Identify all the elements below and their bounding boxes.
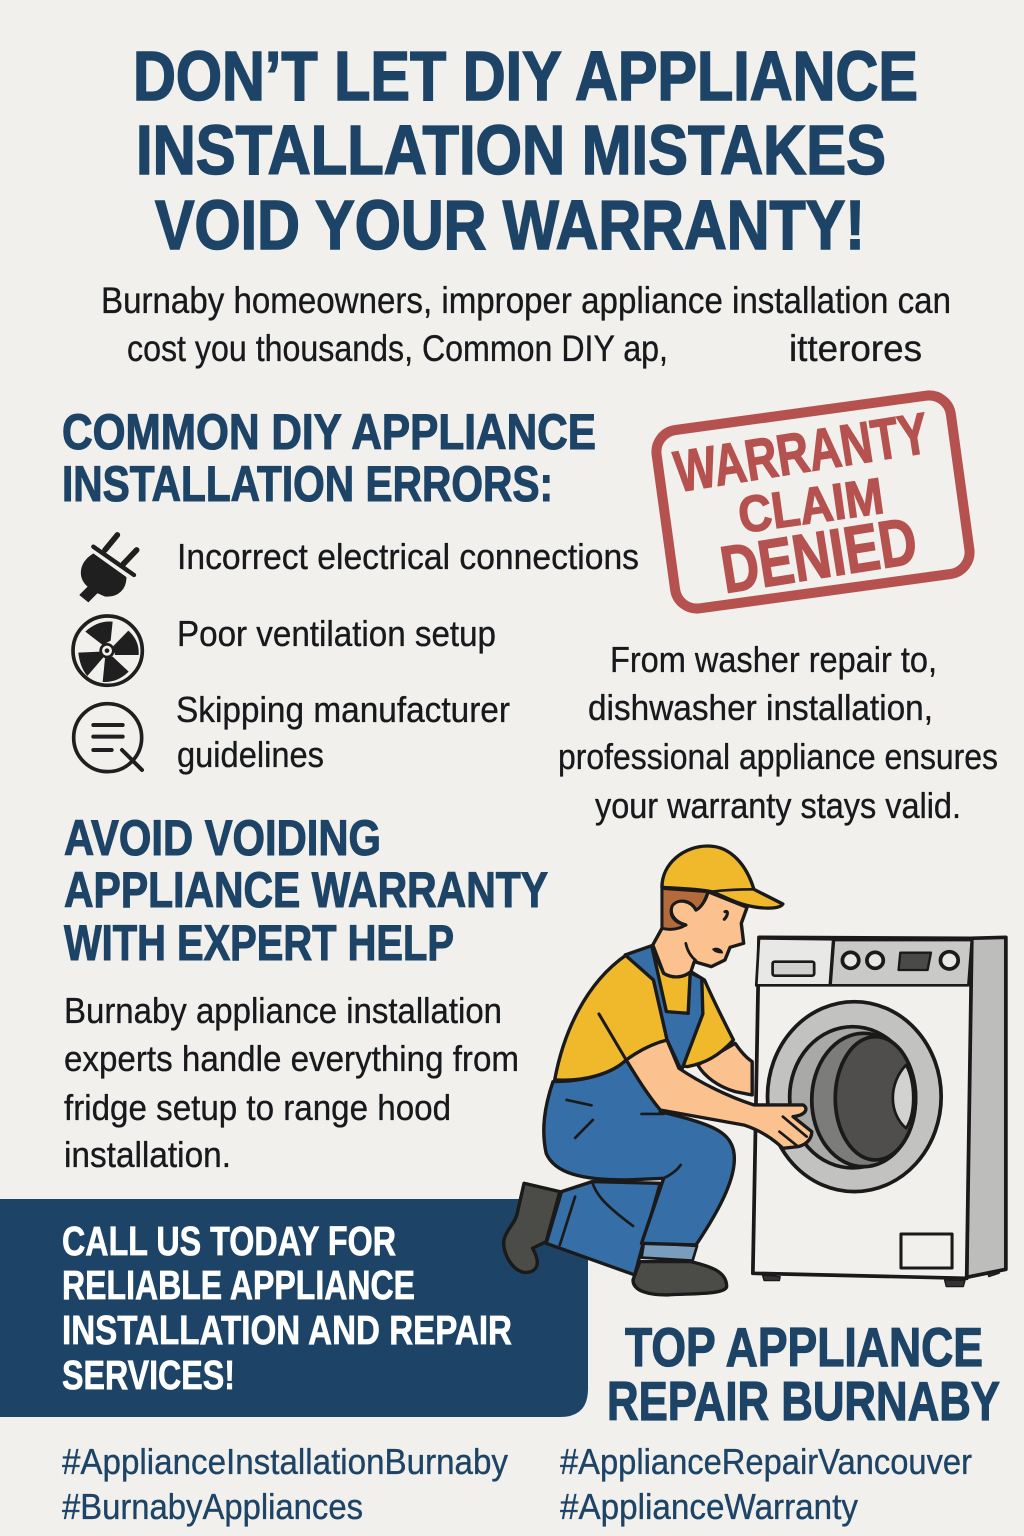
expert help text: Burnaby appliance installation — [64, 990, 502, 1031]
intro text: itterores — [789, 328, 922, 369]
hat — [662, 846, 783, 908]
heading: common errors: COMMON DIY APPLIANCE — [62, 404, 596, 460]
overalls lower — [544, 1060, 734, 1245]
stamp: warranty claim denied: CLAIM — [735, 467, 887, 544]
title: VOID YOUR WARRANTY! — [155, 186, 865, 264]
worker — [504, 846, 812, 1295]
error list: Poor ventilation setup — [177, 613, 496, 654]
call to action panel: INSTALLATION AND REPAIR — [62, 1307, 512, 1353]
expert help text: installation. — [64, 1134, 231, 1175]
call to action panel — [0, 1199, 588, 1417]
icon: guidelines search — [74, 704, 142, 772]
head — [653, 892, 747, 977]
brand heading — [607, 1316, 1000, 1432]
shirt — [555, 947, 733, 1080]
right text block: your warranty stays valid. — [595, 785, 961, 826]
title: INSTALLATION MISTAKES — [136, 111, 886, 189]
hashtags — [62, 1441, 972, 1527]
far arm — [698, 1043, 752, 1095]
leg: back — [546, 1182, 660, 1275]
washing machine — [753, 937, 1006, 1287]
stamp: warranty claim denied — [654, 393, 972, 611]
intro text: cost you thousands, Common DIY ap, — [127, 328, 668, 369]
heading: common errors — [62, 404, 596, 512]
stamp: warranty claim denied: WARRANTY — [670, 401, 933, 505]
call to action panel: RELIABLE APPLIANCE — [62, 1262, 415, 1308]
hashtags: #BurnabyAppliances — [62, 1486, 363, 1527]
boot: back — [504, 1183, 560, 1273]
cuff — [642, 1243, 697, 1261]
right text block: From washer repair to, — [610, 639, 937, 680]
heading: common errors: INSTALLATION ERRORS: — [62, 456, 553, 512]
expert help text: experts handle everything from — [64, 1038, 519, 1079]
heading: avoid voiding — [64, 810, 548, 971]
error list: Skipping manufacturer — [176, 689, 510, 730]
intro text — [101, 280, 951, 369]
right text block: dishwasher installation, — [588, 687, 933, 728]
boot: front — [633, 1262, 727, 1295]
hashtags: #ApplianceRepairVancouver — [560, 1441, 972, 1482]
overalls bib — [625, 946, 703, 1071]
error list: Incorrect electrical connections — [177, 536, 639, 577]
heading: avoid voiding: WITH EXPERT HELP — [64, 915, 454, 971]
hashtags: #ApplianceWarranty — [560, 1486, 858, 1527]
heading: avoid voiding: APPLIANCE WARRANTY — [64, 862, 548, 918]
expert help text — [64, 990, 519, 1175]
error list: guidelines — [177, 734, 324, 775]
error list — [176, 536, 639, 775]
right text block — [558, 639, 998, 826]
near arm — [626, 1040, 812, 1148]
hashtags: #ApplianceInstallationBurnaby — [62, 1441, 508, 1482]
heading: avoid voiding: AVOID VOIDING — [64, 810, 381, 866]
hair — [662, 888, 708, 929]
icon: fan — [73, 616, 142, 685]
intro text: Burnaby homeowners, improper appliance installation can — [101, 280, 951, 321]
icon: plug — [80, 535, 137, 602]
title — [133, 37, 918, 264]
call to action panel: SERVICES! — [62, 1352, 235, 1398]
call to action panel: CALL US TODAY FOR — [62, 1218, 396, 1264]
stamp: warranty claim denied: DENIED — [716, 503, 922, 607]
expert help text: fridge setup to range hood — [64, 1087, 451, 1128]
